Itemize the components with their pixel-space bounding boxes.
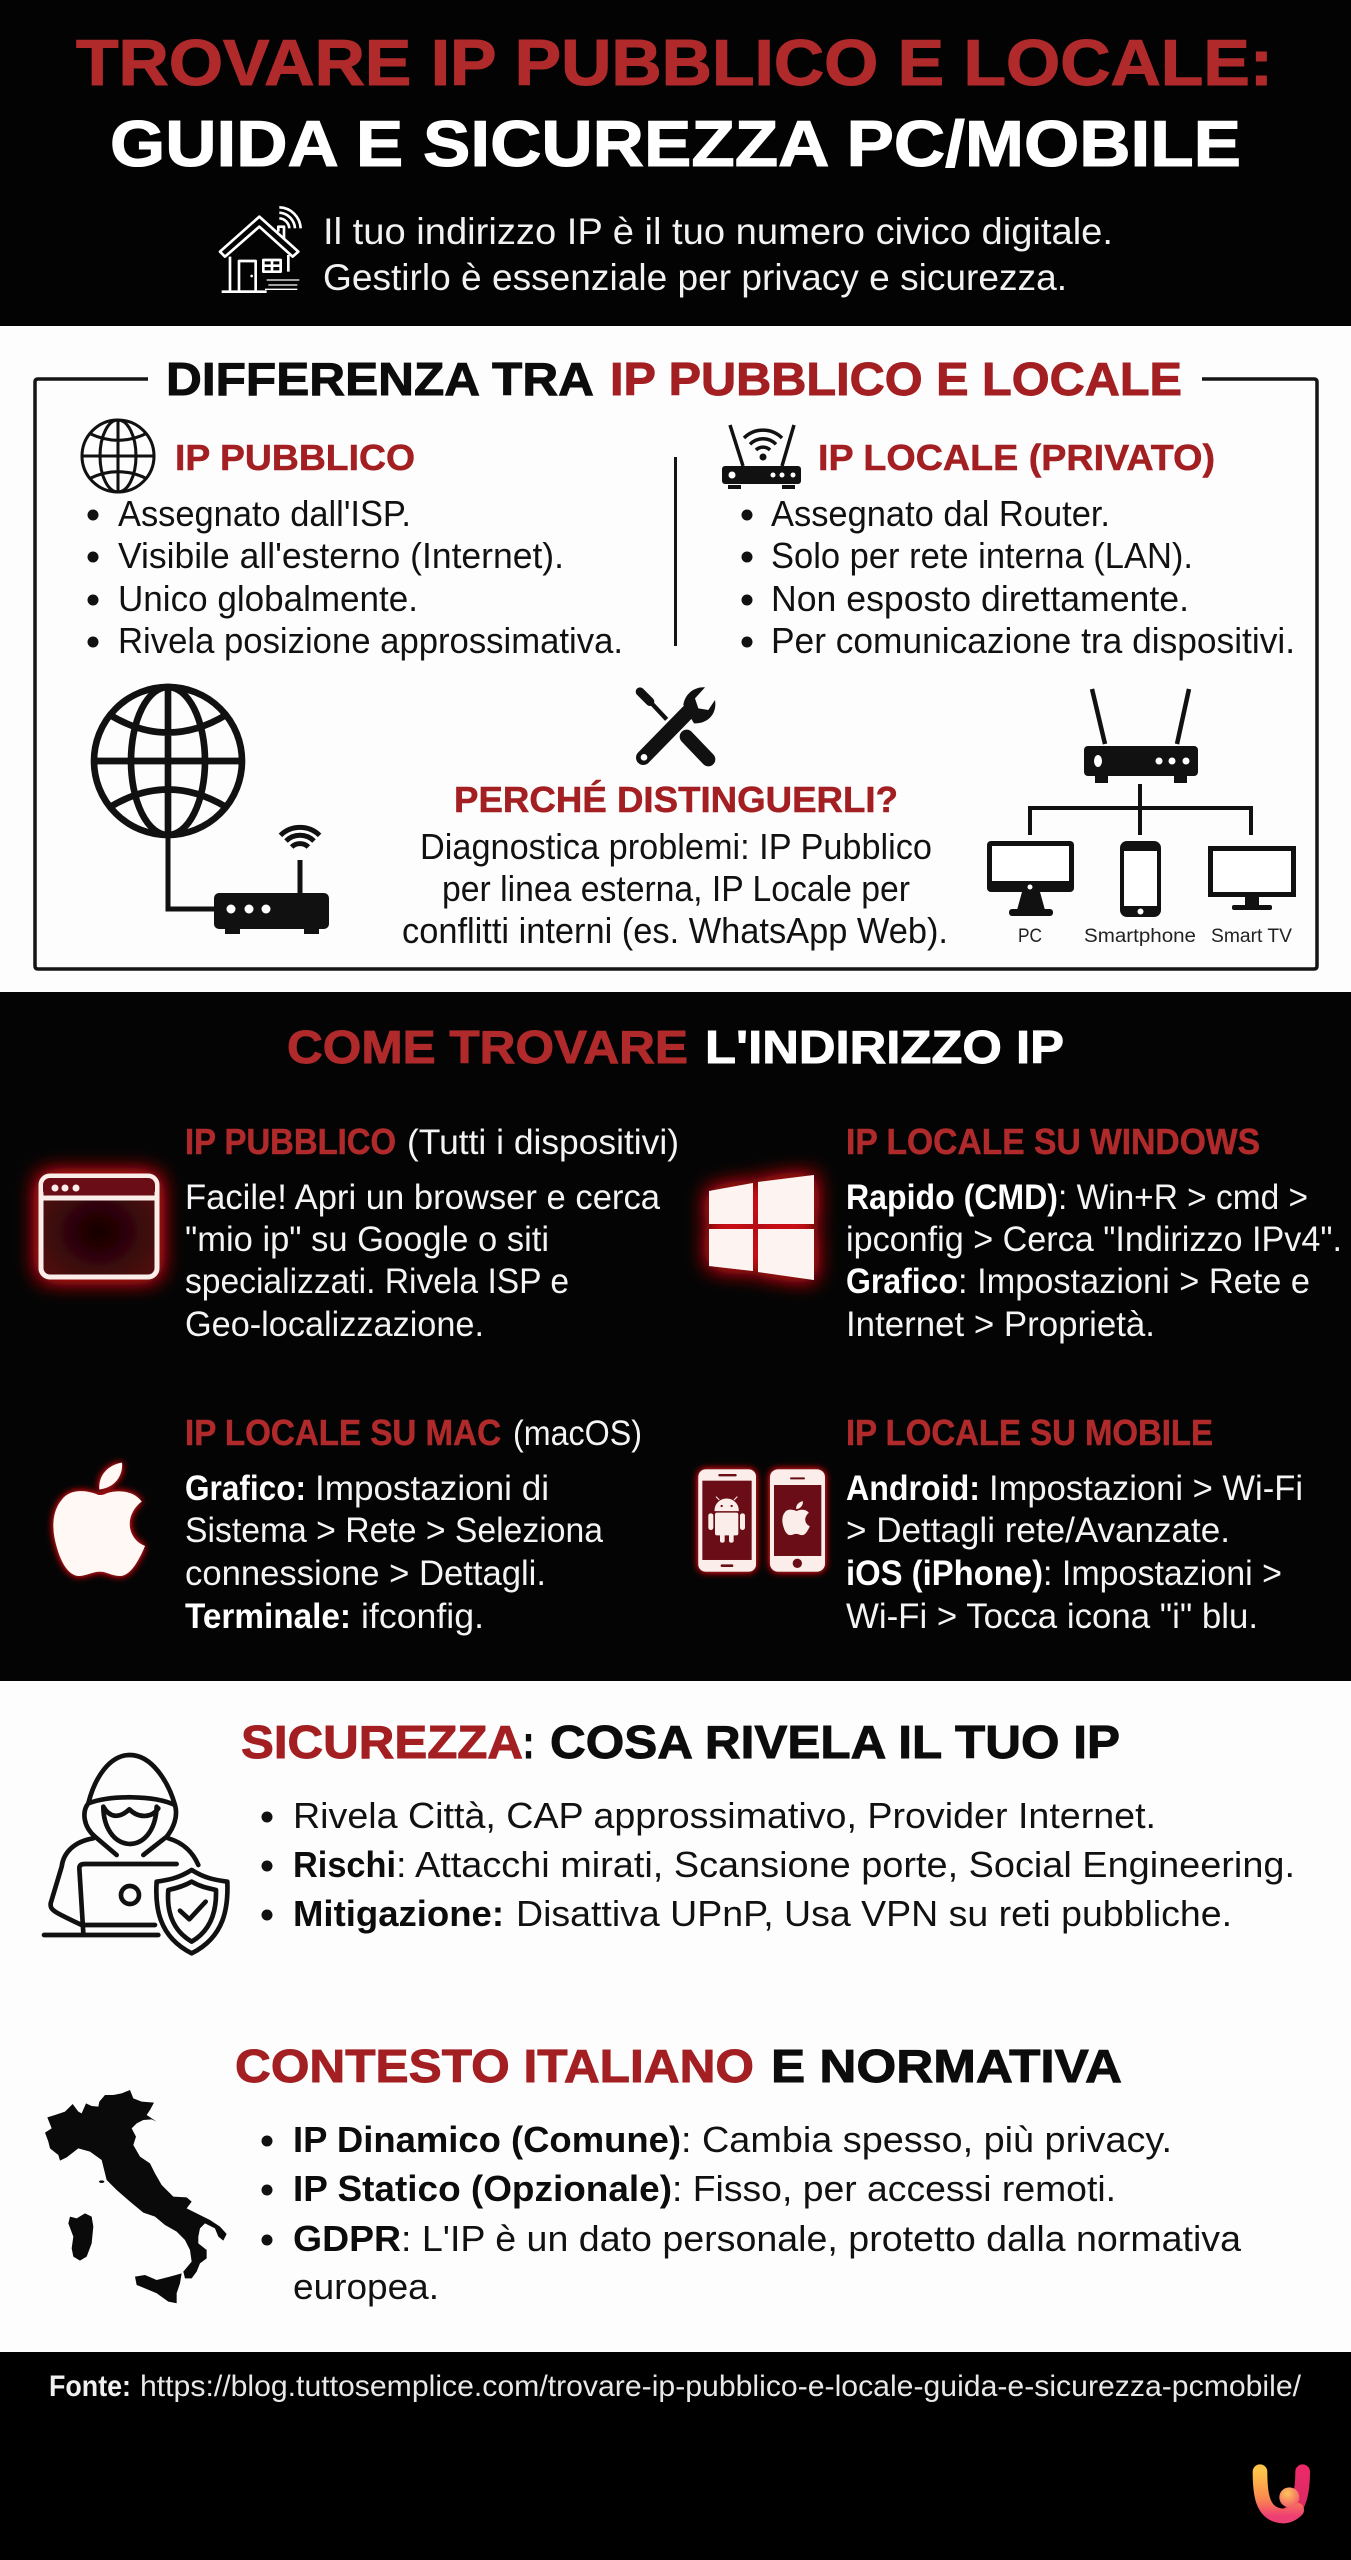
list: IP pubblico: Unico globalmente. [118,578,418,619]
block: IP locale su mobile: IP LOCALE SU MOBILE [846,1412,1213,1453]
list: IP locale: Non esposto direttamente. [771,578,1189,619]
text: perché distinguerli: per linea esterna, IP Locale per [442,868,910,909]
list: IP locale: Assegnato dal Router. [771,493,1110,534]
text: perché distinguerli: Diagnostica problemi: IP Pubblico [420,826,932,867]
list: sicurezza [262,1795,1295,1934]
block: IP locale su Mac: IP LOCALE SU MAC [185,1412,501,1453]
list: IP pubblico [88,493,623,661]
heading: differenza: IP PUBBLICO E LOCALE [610,353,1182,405]
icon: small router [722,425,801,489]
heading: come trovare: COME TROVARE [287,1021,688,1073]
icon: windows logo [709,1175,814,1280]
list: IP locale [742,493,1295,661]
block: IP pubblico: IP PUBBLICO [185,1121,396,1162]
icon: tools [640,687,715,761]
icon: house with wifi [220,207,301,292]
panel frame [35,379,1317,969]
intro text [323,211,1113,298]
block: IP locale su Windows: Rapido (CMD) [846,1178,1058,1217]
block: IP locale su Windows: Internet > Proprietà. [846,1305,1155,1344]
list: IP locale: Per comunicazione tra dispositivi. [771,620,1295,661]
icon: logo [1260,2472,1303,2516]
list: contesto italiano [262,2119,1242,2307]
list: sicurezza: Rivela Città, CAP approssimativo, Provider Internet. [293,1795,1156,1836]
intro text: Gestirlo è essenziale per privacy e sicurezza. [323,257,1067,298]
list: contesto italiano: europea. [293,2266,439,2307]
list: contesto italiano: IP Statico (Opzionale) [293,2168,672,2209]
heading: IP locale: IP LOCALE (PRIVATO) [818,437,1215,478]
panel: header [0,0,1351,326]
panel: differenza tra IP pubblico e locale [0,326,1351,992]
heading: sicurezza: : [523,1716,534,1768]
heading: contesto italiano: CONTESTO ITALIANO [235,2040,754,2092]
heading: perché distinguerli: PERCHÉ DISTINGUERLI? [454,779,898,820]
text: perché distinguerli: conflitti interni (es. WhatsApp Web). [402,910,948,951]
block: IP locale su Windows: : Impostazioni > Rete e [958,1262,1310,1301]
block: IP pubblico: Facile! Apri un browser e cerca [185,1178,661,1217]
list: IP locale: Solo per rete interna (LAN). [771,535,1193,576]
list: sicurezza: Disattiva UPnP, Usa VPN su reti pubbliche. [516,1893,1232,1934]
source line: Fonte: [49,2370,131,2403]
heading: sicurezza: COSA RIVELA IL TUO IP [550,1716,1120,1768]
diagram: router network with devices: Smartphone [1084,926,1196,947]
heading: contesto italiano [235,2040,1122,2092]
intro text: Il tuo indirizzo IP è il tuo numero civico digitale. [323,211,1113,252]
block: IP locale su Windows: Grafico [846,1262,958,1301]
block: IP locale su Mac: Impostazioni di [315,1469,549,1508]
panel: sicurezza [0,1681,1351,2352]
heading: differenza: DIFFERENZA TRA [166,353,594,405]
icon: apple logo [53,1463,145,1576]
list: IP pubblico: Rivela posizione approssimativa. [118,620,623,661]
list: IP pubblico: Visibile all'esterno (Internet). [118,535,564,576]
list: contesto italiano: : Fisso, per accessi remoti. [672,2168,1116,2209]
block: IP pubblico: (Tutti i dispositivi) [407,1123,679,1162]
heading: contesto italiano: E NORMATIVA [771,2040,1122,2092]
block: IP locale su mobile: Android: [846,1469,980,1508]
block: IP locale su Windows [846,1121,1342,1344]
heading: sicurezza [241,1716,1120,1768]
block: IP pubblico: "mio ip" su Google o siti [185,1220,549,1259]
block: IP locale su Mac: connessione > Dettagli. [185,1554,546,1593]
icon: browser window [41,1176,157,1277]
heading: sicurezza: SICUREZZA [241,1716,523,1768]
block: IP locale su mobile: > Dettagli rete/Avanzate. [846,1511,1230,1550]
title [76,26,1273,180]
heading: come trovare [287,1021,1064,1073]
divider [674,457,677,646]
panel: come trovare l'indirizzo IP [0,992,1351,1681]
list: sicurezza: Mitigazione: [293,1893,504,1934]
icon: map of Italy [45,2090,227,2303]
panel: footer [0,2352,1351,2560]
heading: come trovare: L'INDIRIZZO IP [705,1021,1064,1073]
block: IP pubblico: Geo-localizzazione. [185,1305,484,1344]
diagram: router network with devices: PC [1018,926,1042,947]
list: contesto italiano: : Cambia spesso, più privacy. [681,2119,1172,2160]
block: IP locale su Mac: Sistema > Rete > Seleziona [185,1511,604,1550]
heading: differenza [166,353,1182,405]
list: sicurezza: : Attacchi mirati, Scansione porte, Social Engineering. [396,1844,1295,1885]
list: contesto italiano: GDPR [293,2218,401,2259]
icon: small globe [82,420,154,492]
block: IP locale su mobile: Impostazioni > Wi-Fi [989,1469,1303,1508]
diagram: router network with devices [987,689,1294,947]
list: contesto italiano: IP Dinamico (Comune) [293,2119,681,2160]
diagram: router network with devices: Smart TV [1211,926,1292,947]
block: IP locale su Mac: (macOS) [513,1414,642,1453]
list: sicurezza: Rischi [293,1844,396,1885]
block: IP locale su mobile [846,1412,1303,1636]
title: GUIDA E SICUREZZA PC/MOBILE [110,107,1241,180]
icon: hacker with shield [44,1755,227,1953]
list: IP pubblico: Assegnato dall'ISP. [118,493,411,534]
block: IP locale su Mac: ifconfig. [361,1597,484,1636]
block: IP locale su Windows: IP LOCALE SU WINDOWS [846,1121,1260,1162]
block: IP locale su Windows: ipconfig > Cerca "Indirizzo IPv4". [846,1220,1342,1259]
block: IP locale su mobile: Wi-Fi > Tocca icona "i" blu. [846,1597,1258,1636]
block: IP locale su mobile: iOS (iPhone) [846,1554,1043,1593]
block: IP pubblico: specializzati. Rivela ISP e [185,1262,569,1301]
heading: IP pubblico: IP PUBBLICO [175,437,415,478]
text: perché distinguerli [402,826,948,951]
block: IP locale su Mac: Terminale: [185,1597,351,1636]
block: IP locale su Mac: Grafico: [185,1469,306,1508]
source line: https://blog.tuttosemplice.com/trovare-ip-pubblico-e-locale-guida-e-sicurezza-pcmobile/ [140,2370,1302,2403]
block: IP locale su mobile: : Impostazioni > [1043,1554,1282,1593]
block: IP pubblico [185,1121,679,1344]
title: TROVARE IP PUBBLICO E LOCALE: [76,26,1273,99]
icon: phones android and iOS [698,1469,825,1572]
illustration: globe connected to router [94,687,329,934]
list: contesto italiano: : L'IP è un dato personale, protetto dalla normativa [401,2218,1242,2259]
block: IP locale su Windows: : Win+R > cmd > [1058,1178,1308,1217]
block: IP locale su Mac [185,1412,642,1636]
